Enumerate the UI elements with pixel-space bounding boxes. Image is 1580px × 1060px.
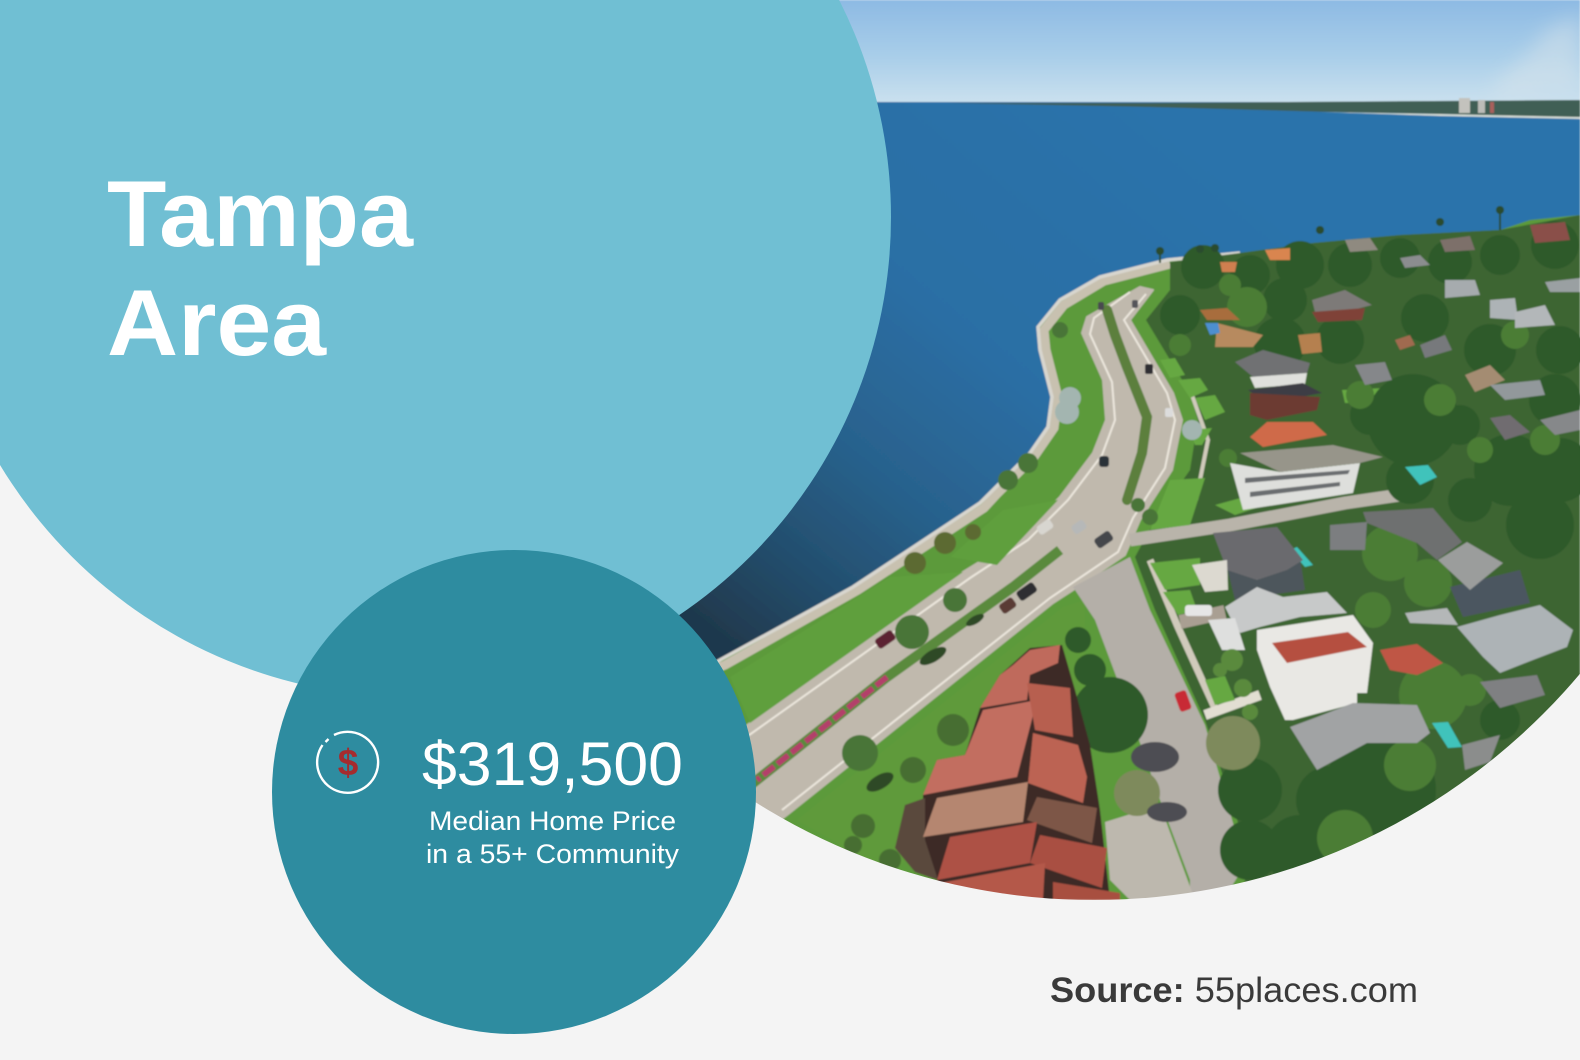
smoke plume bbox=[1501, 16, 1580, 90]
land base: lawn green bbox=[700, 215, 1580, 900]
grass verge beside the townhouses bbox=[797, 600, 1085, 880]
far shoreline bbox=[947, 98, 1580, 119]
houses: far neighborhood bbox=[1200, 222, 1580, 447]
road edge lines bbox=[745, 292, 1175, 810]
cars bbox=[874, 300, 1212, 712]
bushes on the lawn bbox=[904, 524, 981, 574]
tree shadows on the street bbox=[1131, 742, 1187, 822]
title bbox=[107, 161, 414, 375]
houses: near neighborhood bbox=[1192, 508, 1573, 770]
icon: dollar coin: $ bbox=[338, 742, 359, 783]
yard shrubs bbox=[1213, 649, 1258, 720]
palm shadows bbox=[864, 612, 986, 796]
grey-olive trees bbox=[1114, 716, 1260, 816]
walkway along the seawall bbox=[705, 264, 1170, 673]
shrubs in front of the townhouses bbox=[844, 714, 969, 871]
side street bbox=[1073, 557, 1245, 905]
lighter trees bbox=[1169, 274, 1560, 866]
parking court bbox=[1104, 813, 1192, 899]
tree canopy bbox=[1065, 221, 1580, 885]
swimming pools bbox=[1290, 465, 1462, 748]
circle: dark teal stat panel bbox=[272, 550, 756, 1034]
seawall bbox=[700, 253, 1240, 672]
lawn islands by the water bbox=[730, 500, 1058, 723]
front lawns bbox=[1150, 358, 1385, 705]
title: Tampa bbox=[107, 161, 414, 266]
sky bbox=[839, 0, 1580, 104]
bay water bbox=[679, 101, 1580, 660]
stat: median home price label: Median Home Price bbox=[429, 806, 676, 836]
boulevard roadway bbox=[746, 285, 1184, 820]
aerial photo of the Tampa bayshore, clipped to a circle bbox=[679, 0, 1580, 900]
stat: median home price label bbox=[426, 806, 680, 869]
stat: median home price label: in a 55+ Community bbox=[426, 839, 680, 869]
palm trees bbox=[842, 322, 1158, 771]
upper median bbox=[1107, 310, 1147, 500]
title: Area bbox=[107, 270, 327, 375]
source line: Source: 55places.com bbox=[1050, 971, 1418, 1010]
stat: median home price value: $319,500 bbox=[422, 730, 683, 798]
circle: large light-blue panel bbox=[0, 0, 891, 697]
pale palms bbox=[1055, 387, 1202, 440]
icon: dollar coin bbox=[317, 732, 378, 793]
shoreline palms bbox=[1156, 206, 1504, 263]
large white house with grey roof bbox=[1230, 445, 1383, 510]
cross street bbox=[1130, 495, 1400, 540]
sidewalks bbox=[1150, 395, 1260, 715]
lower median with flowers bbox=[755, 546, 1064, 788]
residential land bbox=[1135, 215, 1580, 900]
townhouse row with red roofs bbox=[895, 645, 1120, 900]
